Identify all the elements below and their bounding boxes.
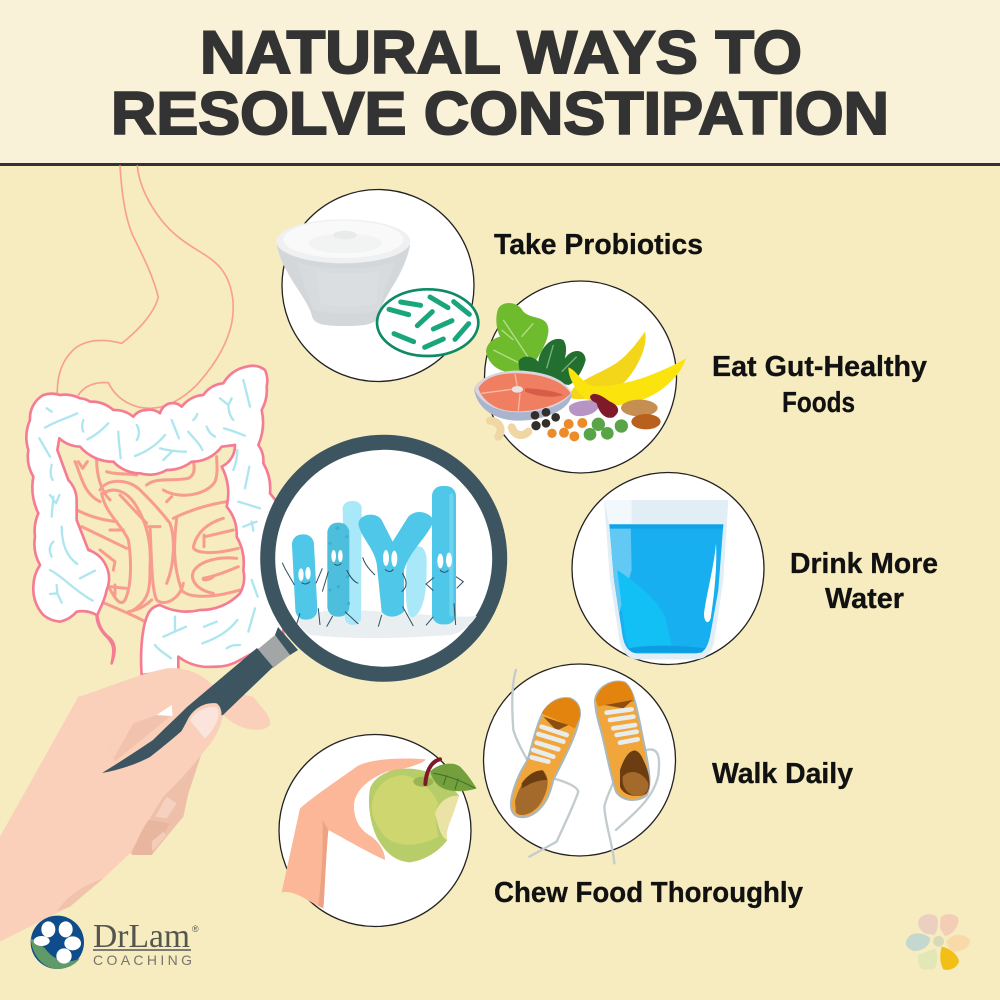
right shoe xyxy=(595,682,650,800)
faded background bacteria xyxy=(343,501,427,625)
thumb xyxy=(177,703,222,757)
logo: DrLam Coaching: ® xyxy=(192,924,199,934)
beans and nuts xyxy=(490,394,661,441)
stem xyxy=(425,759,440,784)
tip circle: water xyxy=(572,472,764,664)
large intestine xyxy=(26,366,283,675)
small intestine xyxy=(75,457,240,622)
hand xyxy=(0,668,270,942)
title xyxy=(111,19,889,147)
colon texture xyxy=(39,380,260,658)
tip circle: probiotics xyxy=(282,190,474,382)
magnifying glass lens xyxy=(268,442,500,674)
palm shadow xyxy=(105,715,170,762)
bacterium 3 xyxy=(358,512,434,627)
tip circle: chewing xyxy=(279,734,471,926)
label: take probiotics: Take Probiotics xyxy=(494,229,703,261)
tip circle: walking xyxy=(484,664,676,856)
label: drink more water xyxy=(790,548,938,615)
label: chew food thoroughly: Chew Food Thoroughly xyxy=(494,877,803,909)
left shoe xyxy=(511,698,580,817)
label: walk daily: Walk Daily xyxy=(712,758,853,790)
shoelaces xyxy=(512,670,659,863)
icon: orange sneakers xyxy=(511,670,659,863)
label: eat gut-healthy foods: Eat Gut-Healthy xyxy=(712,351,927,383)
leaf xyxy=(430,764,477,791)
bacterium 1 xyxy=(282,534,322,625)
icon: hand holding apple xyxy=(282,758,477,908)
logo: DrLam Coaching: COACHING xyxy=(93,952,192,968)
logo: DrLam Coaching xyxy=(31,916,199,969)
bacterium 4 xyxy=(426,486,463,625)
icon: glass of water xyxy=(604,500,728,659)
icon: healthy foods xyxy=(474,303,686,441)
hand holding magnifier xyxy=(0,668,270,942)
header rule xyxy=(0,163,1000,166)
magnifier handle xyxy=(102,627,298,773)
cartoon gut bacteria xyxy=(282,486,477,638)
lens floor shadow xyxy=(297,610,477,638)
logo wordmark: DrLam xyxy=(93,918,190,955)
bananas xyxy=(568,332,686,405)
stomach outline xyxy=(57,166,233,408)
label: eat gut-healthy foods: Foods xyxy=(782,387,855,419)
bacterium 2 xyxy=(322,523,358,627)
icon: yogurt bowl xyxy=(276,219,410,326)
salmon steak xyxy=(474,371,572,421)
title: RESOLVE CONSTIPATION xyxy=(111,80,889,147)
label: eat gut-healthy foods xyxy=(712,351,927,419)
label: drink more water: Drink More xyxy=(790,548,938,580)
colon gap xyxy=(157,705,173,716)
header band xyxy=(0,0,1000,163)
logo emblem xyxy=(31,916,84,969)
digestive system illustration xyxy=(26,166,283,675)
hand xyxy=(282,758,426,908)
icon: probiotic bacteria xyxy=(377,289,478,356)
apple xyxy=(369,769,459,862)
flower watermark xyxy=(906,914,970,970)
label: drink more water: Water xyxy=(825,583,904,615)
lettuce xyxy=(486,303,586,385)
title: NATURAL WAYS TO xyxy=(200,19,802,86)
tip circle: foods xyxy=(484,281,676,473)
